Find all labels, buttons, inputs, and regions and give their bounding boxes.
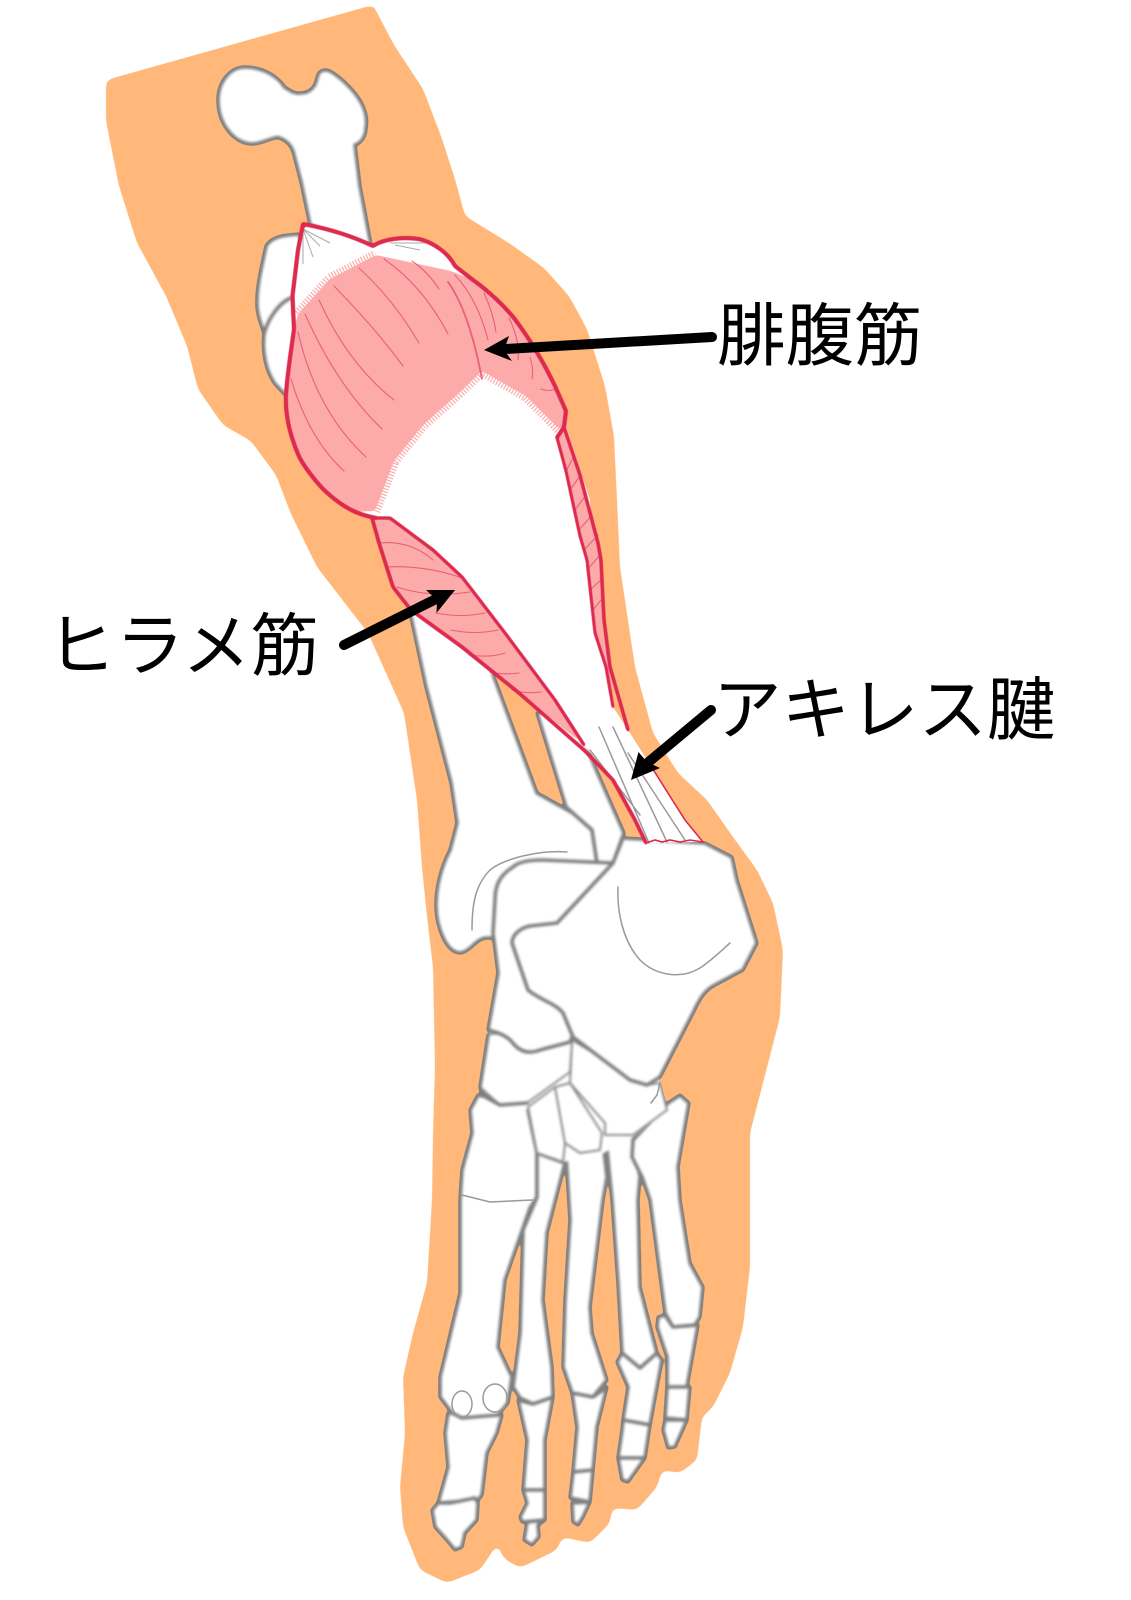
calcaneus — [512, 838, 757, 1085]
bone: femoral condyle — [257, 234, 310, 400]
arrow: to gastrocnemius — [484, 336, 712, 361]
soleus upper outline — [372, 518, 584, 745]
label: soleus: ヒラメ筋 — [47, 608, 319, 685]
bone: femur — [218, 67, 372, 250]
tendon fan at muscle origin — [303, 229, 425, 264]
muscle: soleus — [372, 520, 584, 745]
toe 2 bones — [513, 1153, 565, 1545]
base of midfoot — [480, 1030, 667, 1162]
muscle: gastrocnemius — [286, 224, 566, 518]
arrow: to soleus — [344, 590, 455, 645]
navicular outer edge — [480, 1035, 527, 1105]
cuneiform 2 — [528, 1087, 565, 1162]
leg and foot silhouette — [106, 5, 783, 1583]
toe 5 bones — [632, 1095, 703, 1448]
cuneiform 3 — [555, 1083, 602, 1153]
navicular — [480, 1034, 572, 1105]
bone: fibula — [537, 700, 624, 863]
muscle fibres — [291, 259, 555, 471]
label: achilles tendon: アキレス腱 — [713, 672, 1056, 749]
toe 1 bones — [432, 1095, 537, 1550]
skeleton — [218, 67, 757, 1550]
talus — [488, 860, 613, 1052]
achilles tendon fibres — [590, 727, 703, 843]
toe 4 bones — [605, 1130, 662, 1482]
cuboid — [570, 1040, 667, 1135]
soleus lower outline — [372, 518, 646, 843]
arrow: to achilles tendon — [631, 710, 711, 780]
fringe where muscle meets tendon — [298, 255, 559, 511]
pink muscle belly — [286, 255, 566, 512]
gastrocnemius outline — [286, 224, 566, 518]
thin bone contours — [452, 852, 730, 1417]
label: gastrocnemius: 腓腹筋 — [717, 298, 923, 375]
muscle: gastrocnemius tendon and achilles tendon — [376, 360, 703, 843]
muscle: lateral strip — [557, 427, 628, 730]
bone: tibia — [395, 560, 597, 953]
toe 3 bones — [563, 1133, 607, 1525]
